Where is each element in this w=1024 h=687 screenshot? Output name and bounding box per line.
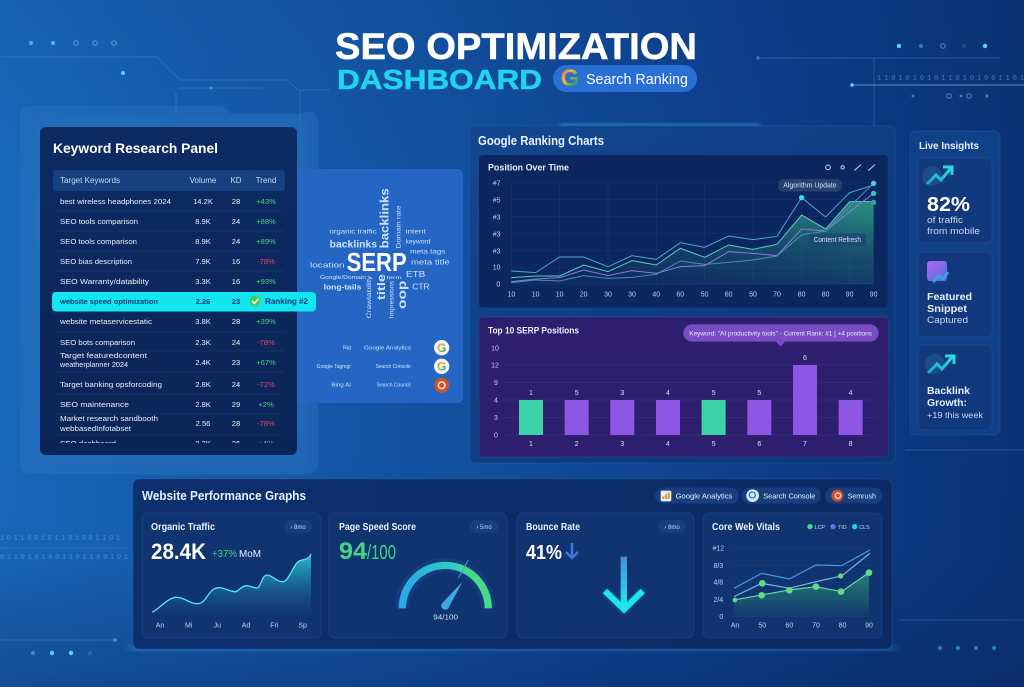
table header: Target Keywords [60, 176, 120, 185]
chart: position over time: 60 [725, 291, 733, 298]
chart: core web vitals: 50 [758, 622, 766, 629]
highlighted row: website speed optimization: 23 [232, 297, 240, 306]
tool list: Google Analytics [364, 345, 411, 351]
card: page speed score: /100 [367, 542, 396, 564]
icon: check [250, 296, 260, 306]
chart: top 10 SERP positions: 3 [494, 415, 498, 422]
table rows: SEO Warranty/datability [60, 277, 149, 286]
chart: position over time: 10 [507, 291, 515, 298]
chart: core web vitals: An [731, 622, 739, 629]
chart: top 10 SERP positions: 4 [666, 441, 670, 448]
chart: position over time: 0 [496, 282, 500, 289]
panel: SERP word cloud [297, 169, 463, 403]
table rows: Target banking opsforcoding [60, 380, 162, 389]
table rows: 28 [232, 197, 240, 206]
panel: live insights [910, 131, 1000, 435]
word cloud: meta tags [410, 248, 446, 255]
chart: position over time: 60 [676, 291, 684, 298]
card: page speed score: Page Speed Score [339, 522, 416, 533]
card: core web vitals: Core Web Vitals [712, 521, 780, 533]
card: 82% mobile traffic: from mobile [927, 226, 980, 236]
card: organic traffic: › 8mo [290, 525, 306, 531]
table rows: 29 [232, 400, 240, 409]
badge: Search Ranking [553, 65, 697, 92]
callout: keyword tooltip: Keyword: "AI productivity tools" - Current Rank: #1 | +4 positions [689, 331, 872, 338]
bars [519, 365, 863, 435]
highlighted row: website speed optimization [52, 292, 316, 312]
chart: top 10 SERP positions: 4 [666, 390, 670, 397]
table header [53, 170, 285, 191]
chart: top 10 SERP positions: 9 [494, 380, 498, 387]
card: bounce rate: › 8mo [664, 525, 680, 531]
chart: top 10 SERP positions: 2 [575, 441, 579, 448]
tool list: G [437, 341, 446, 355]
table rows: -78% [257, 419, 275, 428]
chart: position over time: 90 [846, 291, 854, 298]
chart: top 10 SERP positions: 5 [757, 390, 761, 397]
legend: TID [838, 525, 847, 531]
heading: keyword research panel: Keyword Research Panel [53, 140, 218, 156]
table rows: 2.4K [195, 358, 211, 367]
chart: top 10 SERP positions: 7 [803, 441, 807, 448]
heading: website performance graphs: Website Performance Graphs [142, 489, 306, 503]
chart: speed gauge: 94/100 [433, 615, 458, 622]
word cloud [310, 188, 450, 318]
tool list: Search Council [377, 383, 411, 389]
word cloud: meta title [411, 257, 450, 266]
tool list: G [437, 360, 446, 374]
card: featured snippet: Snippet [927, 304, 968, 315]
table rows: Market research sandbooth [60, 414, 158, 423]
card: 82% mobile traffic: 82% [927, 194, 970, 216]
heading: google ranking charts: Google Ranking Charts [478, 134, 604, 148]
chart: top 10 SERP positions: 3 [620, 390, 624, 397]
word cloud: keyword [406, 239, 431, 246]
chart: position over time: 90 [870, 291, 878, 298]
chart: top 10 SERP positions: 1 [529, 390, 533, 397]
background: 0 1 1 0 1 0 1 0 0 1 1 0 1 1 0 0 1 0 1 [0, 554, 128, 562]
word cloud: organic traffic [329, 229, 377, 236]
table rows: 2.2K [195, 439, 211, 448]
chart: position over time: #7 [493, 180, 501, 187]
card: 82% mobile traffic: of traffic [927, 215, 964, 225]
table rows: +2% [258, 400, 274, 409]
chart: top 10 SERP positions: Top 10 SERP Positions [488, 326, 579, 336]
chart: position over time [479, 155, 888, 308]
table rows: best wireless headphones 2024 [60, 197, 171, 206]
table rows: Target featuredcontent [60, 351, 148, 360]
chart: top 10 SERP positions: 5 [575, 390, 579, 397]
chart: top 10 SERP positions: 5 [712, 441, 716, 448]
chart: top 10 SERP positions: 10 [491, 345, 499, 352]
chart: organic traffic area: An [156, 622, 164, 629]
chart: top 10 SERP positions: 3 [620, 441, 624, 448]
badge: Search Ranking: G [561, 65, 579, 92]
table rows: 28 [232, 419, 240, 428]
word cloud: Domain rate [395, 205, 402, 248]
word cloud: location [310, 261, 345, 270]
chart: position over time: 10 [532, 291, 540, 298]
icons: chart tools [826, 165, 875, 171]
card: organic traffic: Organic Traffic [151, 522, 215, 533]
card: organic traffic: 28.4K [151, 539, 206, 564]
card: backlink growth [918, 345, 992, 430]
card: page speed score: 94 [339, 538, 368, 565]
chart: position over time: #3 [493, 214, 501, 221]
chart: core web vitals: 60 [785, 622, 793, 629]
chart: core web vitals: 80 [839, 622, 847, 629]
table rows: -78% [257, 257, 275, 266]
tool badges: Semrush [848, 493, 876, 500]
table rows: +39% [256, 317, 276, 326]
chart: top 10 SERP positions: 8 [849, 441, 853, 448]
callout: algorithm update [778, 179, 842, 192]
tool badges [655, 488, 882, 504]
chart: top 10 SERP positions [479, 317, 888, 457]
chart: core web vitals: 8/3 [713, 563, 723, 570]
card: featured snippet [918, 252, 992, 337]
tool list [317, 340, 449, 393]
tool list: Search Console [376, 364, 411, 370]
table rows: 24 [232, 237, 240, 246]
title: DASHBOARD [337, 64, 542, 95]
chart: organic traffic area: Mi [185, 622, 193, 629]
chart: core web vitals: 4/8 [713, 580, 723, 587]
table rows: SEO bias description [60, 257, 132, 266]
table rows: 28 [232, 317, 240, 326]
table rows: -72% [257, 380, 275, 389]
card: bounce rate: 41% [526, 542, 562, 564]
table rows [56, 197, 284, 448]
table rows: webbasedInfotabset [59, 424, 132, 433]
card: 82% mobile traffic [918, 158, 992, 243]
legend: CLS [859, 525, 870, 531]
table header: Volume [190, 176, 217, 185]
card: bounce rate [517, 513, 694, 638]
card: page speed score: › 5mo [476, 525, 492, 531]
chart: top 10 SERP positions: 0 [494, 433, 498, 440]
table rows: weatherplanner 2024 [59, 360, 128, 369]
chart: top 10 SERP positions: 4 [494, 398, 498, 405]
table rows: SEO maintenance [60, 400, 129, 409]
card: page speed score [329, 513, 507, 638]
word cloud: title [376, 274, 388, 300]
chart: position over time: 20 [580, 291, 588, 298]
table rows: 23 [232, 358, 240, 367]
table rows: 24 [232, 338, 240, 347]
word cloud: SERP [347, 247, 407, 277]
card: featured snippet: Captured [927, 315, 968, 325]
word cloud: backlinks [378, 188, 392, 248]
chart: position over time: Position Over Time [488, 163, 569, 173]
chart: organic traffic area [152, 554, 311, 629]
tool list: Bing AI [331, 383, 351, 389]
word cloud: ETB [406, 269, 426, 279]
table rows: 8.9K [195, 217, 211, 226]
card: organic traffic: MoM [239, 548, 261, 560]
table rows: +88% [256, 217, 276, 226]
table rows: 2.8K [195, 400, 211, 409]
table header: Trend [256, 176, 276, 185]
chart: organic traffic area: Sp [298, 622, 307, 629]
chart: position over time: #5 [493, 197, 501, 204]
chart: position over time: 80 [822, 291, 830, 298]
card: backlink growth: +19 this week [927, 410, 984, 420]
callout: keyword tooltip [683, 324, 879, 347]
chart: core web vitals: 2/4 [713, 597, 723, 604]
word cloud: long-tails [324, 282, 361, 291]
icon: large down arrow [605, 557, 643, 609]
table rows: 2.56 [196, 419, 210, 428]
word cloud: intent [406, 228, 426, 235]
card: backlink growth: Backlink [927, 386, 970, 397]
table rows: 7.9K [195, 257, 211, 266]
panel: website performance graphs [133, 479, 892, 649]
chart: top 10 SERP positions: 6 [803, 355, 807, 362]
table rows: 3.8K [195, 317, 211, 326]
tool badges: Search Console [763, 493, 815, 500]
chart: core web vitals: 0 [719, 614, 723, 621]
table rows: +67% [256, 358, 276, 367]
card: backlink growth: Growth: [927, 398, 967, 409]
chart: position over time: 10 [493, 265, 501, 272]
chart: position over time: #3 [493, 231, 501, 238]
table rows: +93% [256, 277, 276, 286]
chart: top 10 SERP positions: 12 [491, 363, 499, 370]
chart: top 10 SERP positions: 5 [712, 390, 716, 397]
background: 1 0 1 1 0 0 1 0 1 1 0 1 0 0 1 1 0 1 [0, 535, 120, 543]
table rows: +89% [256, 237, 276, 246]
table rows: SEO tools comparison [60, 237, 137, 246]
table rows: 2.3K [195, 338, 211, 347]
title [335, 25, 697, 95]
callout: content refresh: Content Refresh [814, 237, 861, 244]
highlighted row: website speed optimization: Ranking #2 [265, 297, 309, 306]
table rows: 14.2K [193, 197, 213, 206]
chart: position over time: 30 [628, 291, 636, 298]
callout: algorithm update: Algorithm Update [783, 183, 837, 190]
word cloud: Impressions [390, 281, 396, 318]
word cloud: Crawlability [367, 276, 373, 318]
word cloud: CTR [412, 281, 430, 291]
title: SEO OPTIMIZATION [335, 25, 697, 67]
chart: core web vitals: #12 [712, 546, 724, 553]
word cloud: term [387, 275, 402, 281]
table rows: 24 [232, 217, 240, 226]
chart: position over time: 50 [701, 291, 709, 298]
tool badges: Google Analytics [676, 493, 733, 500]
chart: position over time: 50 [749, 291, 757, 298]
highlighted row: website speed optimization: website speed optimization [59, 297, 158, 306]
background: 1 1 0 1 0 1 0 1 0 1 1 0 1 0 1 0 0 1 1 0 1 [877, 75, 1024, 83]
chart: position over time: 70 [773, 291, 781, 298]
panel: keyword research [40, 127, 316, 455]
tool list: Google Tagmgr [317, 364, 351, 370]
chart: top 10 SERP positions: 1 [529, 441, 533, 448]
chart: organic traffic area: Ad [242, 622, 250, 629]
chart: position over time: #3 [493, 248, 501, 255]
legend: LCP [815, 525, 825, 531]
icon: small down arrow [566, 543, 578, 558]
chart: organic traffic area: Fri [270, 622, 279, 629]
table rows: SEO dashboard [60, 439, 116, 448]
word cloud: oop [395, 281, 409, 309]
card: bounce rate: Bounce Rate [526, 522, 580, 533]
table rows: +4% [258, 439, 274, 448]
chart: organic traffic area: Ju [214, 622, 221, 629]
table rows: 16 [232, 257, 240, 266]
chart: top 10 SERP positions: 4 [849, 390, 853, 397]
callout: content refresh [809, 233, 866, 246]
tool list: Rid [343, 345, 351, 351]
table rows: 2.8K [195, 380, 211, 389]
highlighted row: website speed optimization: 2.26 [196, 297, 210, 306]
table rows: SEO bots comparison [60, 338, 135, 347]
table rows: 8.9K [195, 237, 211, 246]
chart: speed gauge [402, 560, 488, 622]
card: core web vitals [703, 513, 882, 638]
table rows: 26 [232, 439, 240, 448]
word cloud: Google/Domain [320, 275, 366, 281]
chart: core web vitals: 90 [865, 622, 873, 629]
table header: KD [230, 176, 242, 185]
chart: core web vitals: 70 [812, 622, 820, 629]
card: organic traffic: +37% [212, 548, 237, 560]
chart: core web vitals [712, 524, 873, 629]
chart: top 10 SERP positions: 6 [757, 441, 761, 448]
heading: live insights: Live Insights [919, 140, 979, 152]
badge: Search Ranking: Search Ranking [586, 72, 688, 88]
panel: google ranking charts [470, 126, 895, 463]
card: featured snippet: Featured [927, 292, 972, 303]
table rows: SEO tools comparison [60, 217, 138, 226]
table rows: 24 [232, 380, 240, 389]
chart: position over time: 30 [604, 291, 612, 298]
table rows: 16 [232, 277, 240, 286]
table rows: +43% [256, 197, 276, 206]
table rows: 3.3K [195, 277, 211, 286]
chart: position over time: 40 [652, 291, 660, 298]
chart: position over time: 10 [556, 291, 564, 298]
chart: position over time: 80 [798, 291, 806, 298]
table rows: website metaservicestatic [59, 317, 152, 326]
card: organic traffic [142, 513, 321, 638]
word cloud: backlinks [330, 240, 377, 251]
table rows: -78% [257, 338, 275, 347]
legend [807, 524, 870, 531]
